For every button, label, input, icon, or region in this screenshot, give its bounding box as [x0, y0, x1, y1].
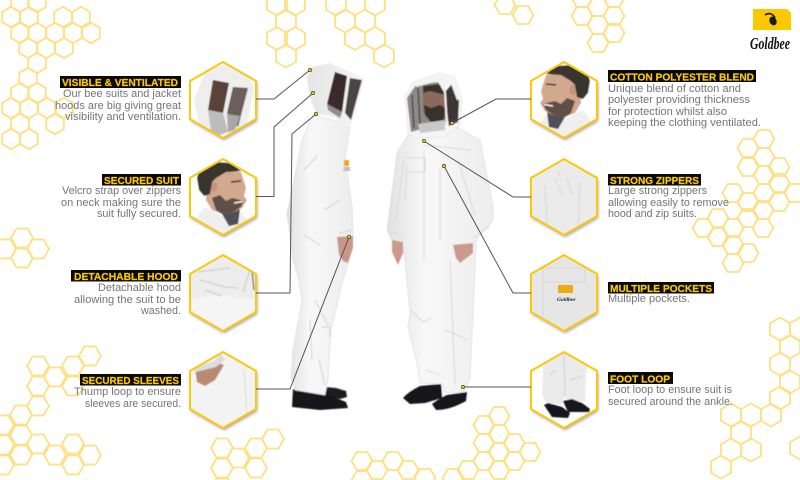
icon: bee [765, 14, 778, 27]
callout: cotton polyester blend [522, 58, 761, 143]
leader: secured sleeves [256, 235, 351, 389]
heading: SECURED SLEEVES [82, 376, 179, 387]
honeycomb: middle left [0, 228, 49, 268]
description: visibility and ventilation. [65, 111, 181, 123]
description: keeping the clothing ventilated. [608, 117, 761, 129]
description [55, 88, 181, 123]
description: Velcro strap over zippers [62, 185, 181, 197]
callout: secured sleeves [74, 352, 256, 428]
honeycomb: right [692, 130, 800, 272]
leader: detachable hood [256, 112, 318, 293]
description [61, 185, 181, 220]
heading: VISIBLE & VENTILATED [62, 78, 178, 89]
neck collar [418, 120, 445, 133]
heading: SECURED SUIT [104, 176, 179, 187]
description: on neck making sure the [61, 197, 181, 209]
heading: MULTIPLE POCKETS [610, 284, 712, 295]
description: Foot loop to ensure suit is [608, 384, 732, 396]
leader lines with dots [256, 68, 531, 389]
honeycomb: top left [2, 0, 100, 149]
hexagon frame [190, 255, 256, 331]
heading: DETACHABLE HOOD [74, 272, 178, 283]
rear shoe [325, 387, 347, 399]
hand [337, 236, 353, 263]
hexagon frame [190, 62, 256, 138]
description: hoods are big giving great [55, 100, 181, 112]
hood [307, 63, 365, 130]
photo: sleeve cuff [190, 352, 256, 428]
beard [424, 105, 445, 122]
description: Unique blend of cotton and [608, 83, 741, 95]
callout: detachable hood [71, 255, 256, 331]
leader: secured suit [256, 91, 315, 196]
description: hood and zip suits. [608, 208, 697, 220]
honeycomb: bottom centre left [211, 430, 284, 480]
veil bands [416, 79, 458, 125]
figure: suit front view [387, 73, 493, 410]
figure: suit side view [287, 63, 365, 410]
description: polyester providing thickness [608, 94, 750, 106]
hexagon frame [190, 352, 256, 428]
photo: man's face [189, 162, 259, 238]
callout: foot loop [531, 350, 733, 428]
callout: multiple pockets [531, 255, 714, 331]
suit folds [393, 145, 490, 385]
photo: man's face [530, 64, 600, 142]
suit body [387, 128, 493, 393]
description [74, 386, 181, 410]
callout: visible and ventilated [55, 62, 256, 138]
suit folds [304, 155, 352, 385]
photo: pocket with logo: Goldbee [557, 297, 576, 303]
hair [423, 84, 445, 95]
description: Thump loop to ensure [74, 386, 181, 398]
hexagon frame [531, 159, 597, 235]
heading: FOOT LOOP [610, 374, 670, 386]
honeycomb: bottom centre right [352, 407, 540, 480]
shoes [403, 384, 467, 410]
photo: zipper [531, 159, 597, 235]
callout: strong zippers [531, 159, 729, 235]
suit body [287, 115, 353, 395]
veil [407, 82, 447, 132]
description: sleeves are secured. [85, 398, 181, 410]
veil windows [327, 72, 347, 112]
description: allowing easily to remove [608, 197, 729, 209]
heading: STRONG ZIPPERS [610, 176, 699, 187]
description [608, 384, 733, 408]
brand logo [750, 9, 791, 53]
description: allowing the suit to be [74, 294, 181, 306]
leader: strong zippers [422, 139, 531, 197]
heading: COTTON POLYESTER BLEND [610, 72, 754, 84]
veil streaks [412, 88, 420, 128]
description: secured around the ankle. [608, 396, 733, 408]
callout: secured suit [61, 155, 265, 240]
hexagon frame [531, 255, 597, 331]
description [608, 83, 761, 129]
face [423, 85, 446, 121]
logo badge [753, 9, 791, 30]
leader: foot loop [461, 385, 531, 389]
description: for protection whilst also [608, 106, 727, 118]
callouts: left side [55, 62, 265, 428]
leader: cotton polyester blend [450, 99, 531, 125]
honeycomb: top centre [267, 0, 394, 68]
honeycomb: bottom left [0, 346, 101, 474]
hexagon frame [190, 159, 256, 235]
hood [405, 73, 462, 138]
description [74, 282, 181, 317]
description: Detachable hood [98, 282, 181, 294]
hands [392, 240, 473, 265]
honeycomb: top right [494, 0, 624, 52]
leader: visible and ventilated [256, 68, 312, 99]
description: Large strong zippers [608, 185, 707, 197]
photo: hood attachment [190, 255, 256, 331]
honeycomb: bottom right [711, 318, 800, 478]
front shoe [292, 389, 348, 410]
callouts: right side [522, 58, 761, 428]
description: Our bee suits and jacket [63, 88, 181, 100]
photo: legs and boots [531, 350, 597, 428]
chest logo [344, 160, 349, 166]
description: washed. [140, 305, 181, 317]
description: suit fully secured. [97, 208, 181, 220]
leader: multiple pockets [442, 164, 531, 293]
hexagon frame [531, 62, 597, 138]
description [608, 185, 729, 220]
photo: pocket with logo [531, 255, 597, 331]
hexagon frame [531, 352, 597, 428]
photo: hood side [190, 62, 256, 138]
description: Multiple pockets. [608, 293, 690, 305]
